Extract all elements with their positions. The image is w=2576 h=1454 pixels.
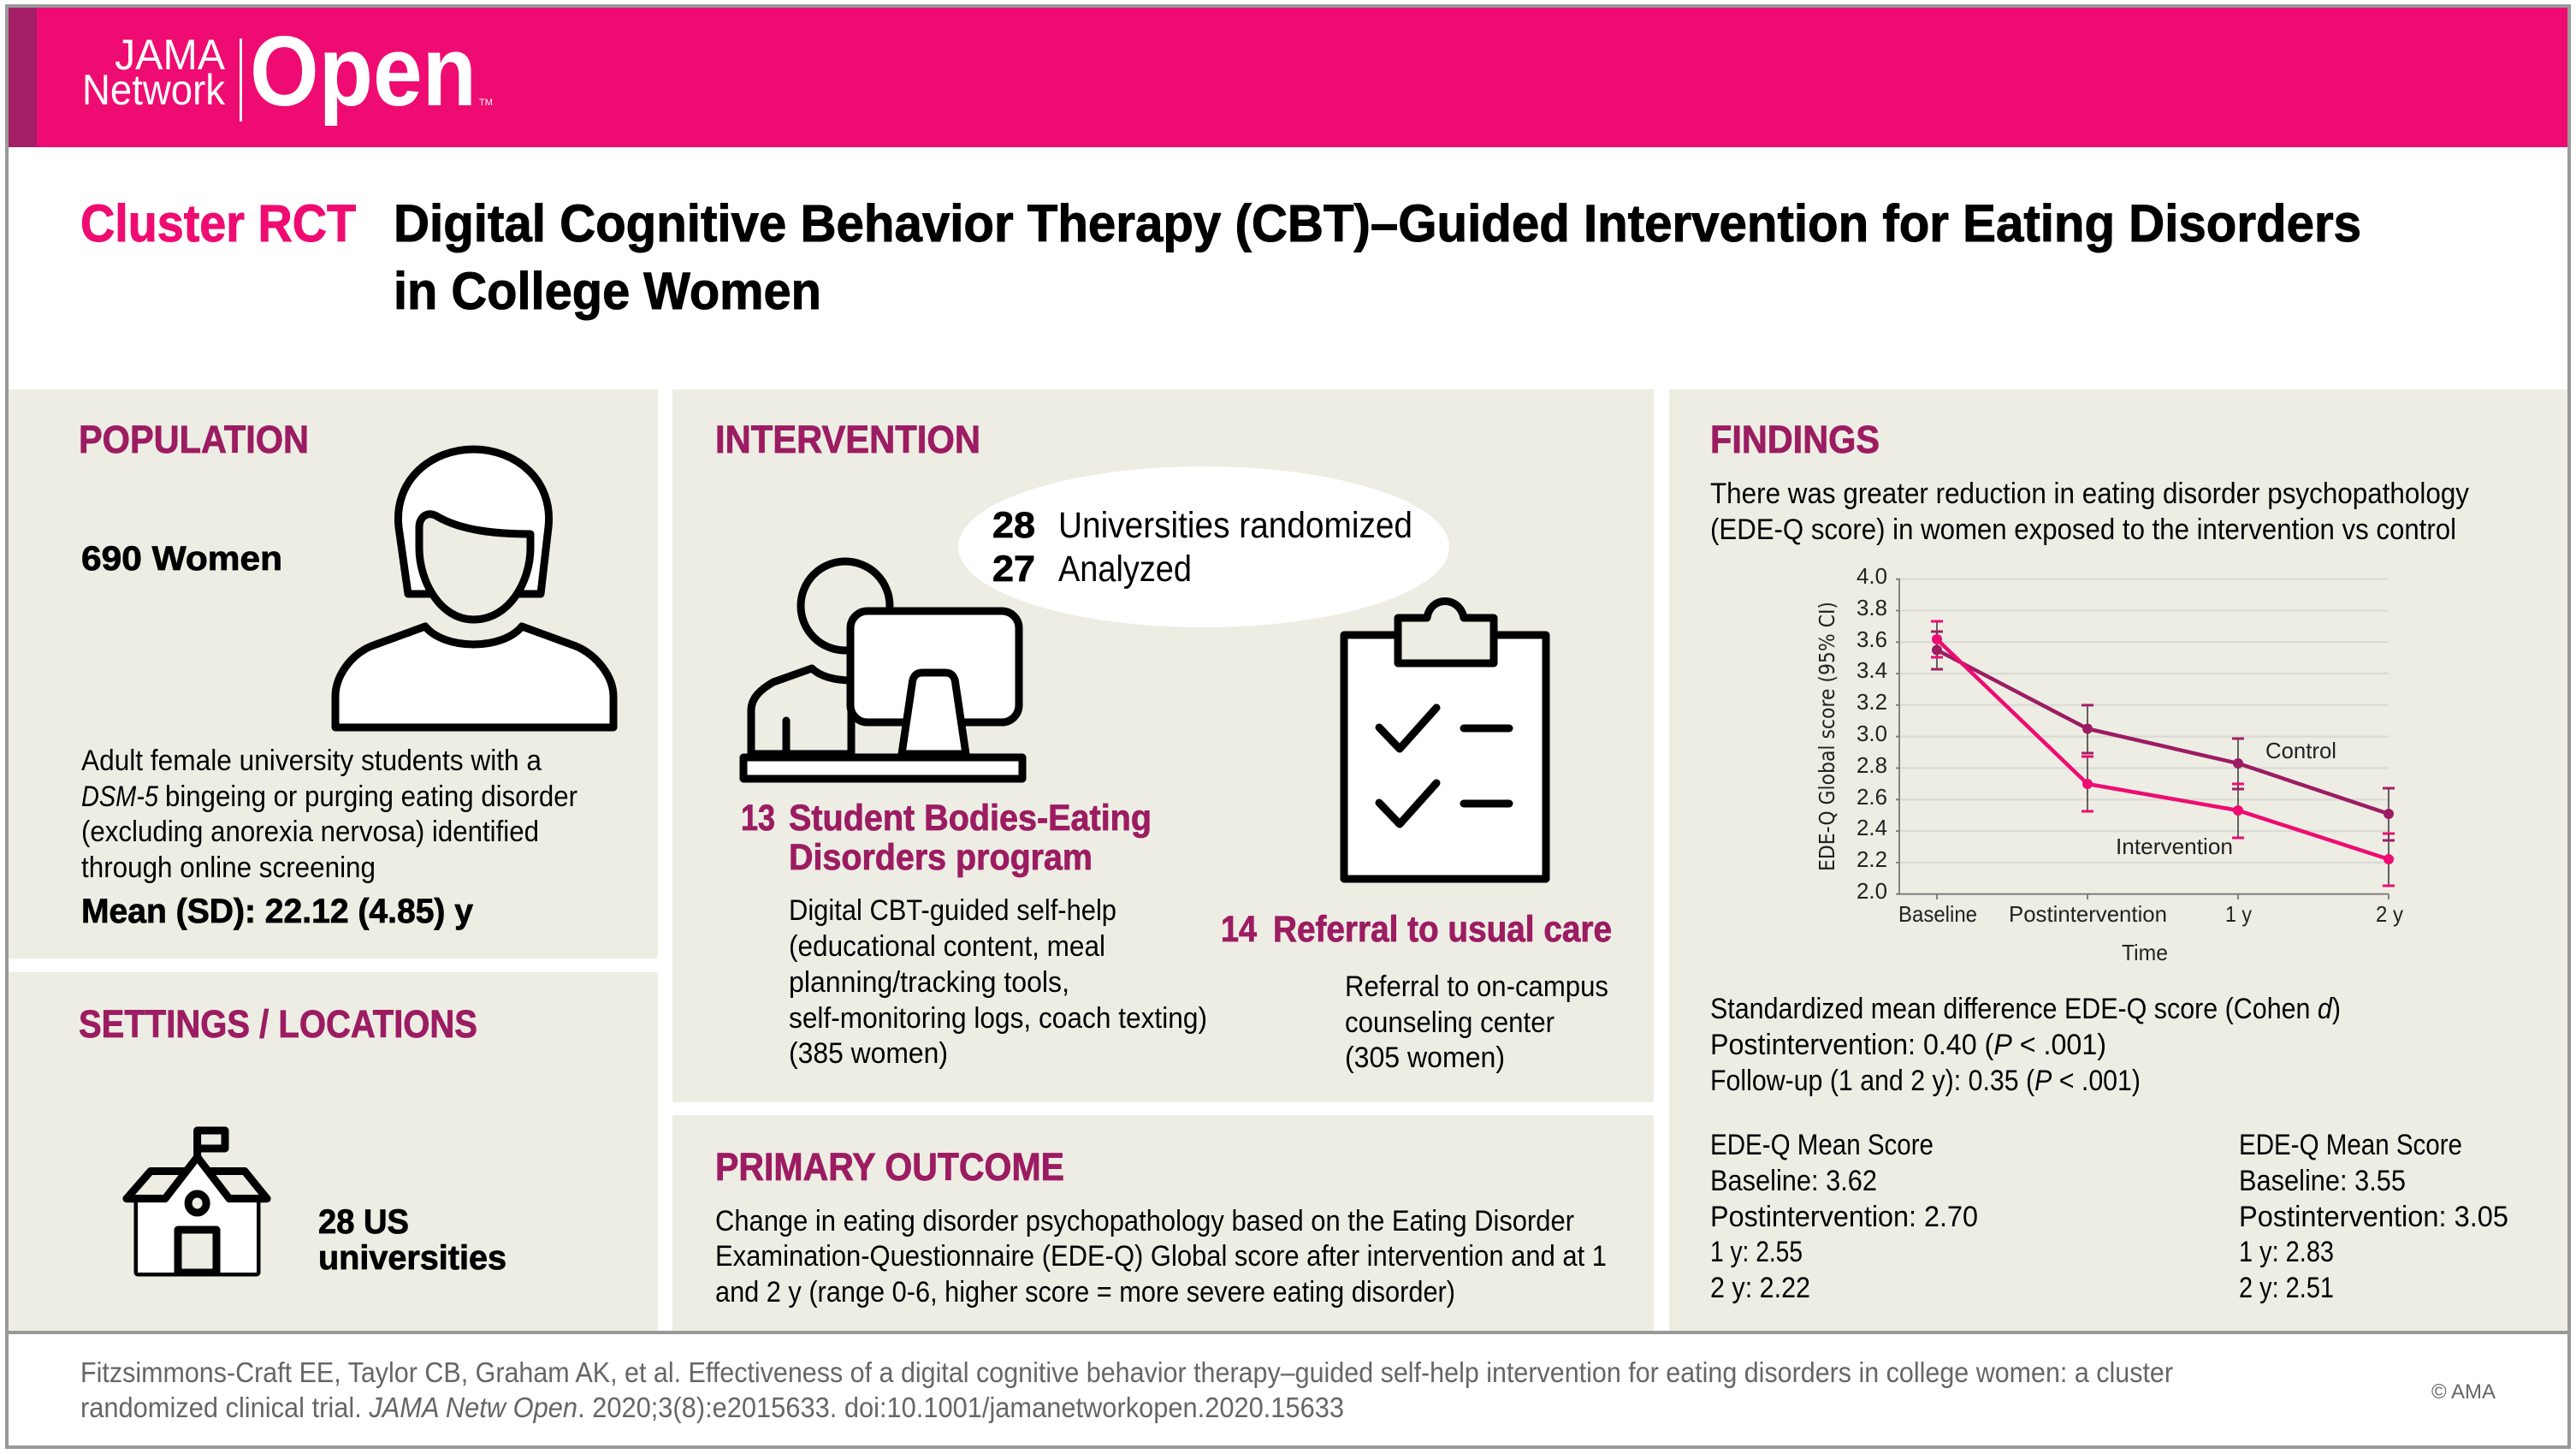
series label: control: Control [2265,738,2336,763]
footer citation: randomized clinical trial. JAMA Netw Open. 2020;3(8):e2015633. doi:10.1001/jamanetworkopen.2020.15633 [80,1392,1344,1423]
control mean scores: 2 y: 2.51 [2239,1272,2334,1304]
arm description: student bodies: planning/tracking tools, [789,966,1069,999]
arm description: usual care: Referral to on-campus [1345,970,1608,1003]
arm label: student bodies: Disorders program [789,837,1093,878]
logo: JAMA Network Open: JAMA [115,31,226,79]
y-axis tick labels: 4.0 [1856,563,1887,589]
y-axis tick labels: 3.0 [1856,721,1887,746]
arm description: student bodies: (educational content, meal [789,930,1105,963]
description: (excluding anorexia nervosa) identified [81,816,539,848]
callout: universities randomized [958,466,1449,627]
logo: JAMA Network Open: Network [82,66,226,114]
outcome description: Examination-Questionnaire (EDE-Q) Global score after intervention and at 1 [715,1240,1607,1273]
description [81,745,577,884]
intervention mean scores: 1 y: 2.55 [1710,1236,1803,1268]
icon: person at computer [743,561,1022,779]
count: 28 US universities [318,1203,506,1277]
arm label: usual care: Referral to usual care [1273,909,1612,950]
y-axis tick labels [1856,563,1887,904]
x-axis labels: Time [2122,940,2168,965]
description: bingeing or purging eating disorder [165,780,577,813]
count: 28 US universities: universities [318,1239,506,1277]
effect sizes: Standardized mean difference EDE-Q score (Cohen d) [1710,993,2341,1025]
effect sizes: Follow-up (1 and 2 y): 0.35 (P < .001) [1710,1065,2141,1097]
heading: findings: FINDINGS [1710,418,1880,461]
effect sizes: Postintervention: 0.40 (P < .001) [1710,1029,2106,1061]
header banner [7,7,2569,147]
title: Digital Cognitive Behavior Therapy (CBT)–Guided Intervention for Eating Disorders [394,194,2361,252]
series: intervention line [1932,634,2394,864]
findings summary: There was greater reduction in eating disorder psychopathology [1710,478,2469,510]
series: control line [1932,645,2394,819]
findings summary: (EDE-Q score) in women exposed to the intervention vs control [1710,513,2456,546]
outcome description: Change in eating disorder psychopathology based on the Eating Disorder [715,1205,1574,1237]
icon: woman [335,449,613,727]
y-axis tick labels: 2.2 [1856,846,1887,872]
x-axis labels [1898,901,2403,965]
y-axis tick labels: 2.6 [1856,784,1887,810]
panel: population [9,389,658,958]
arm description: student bodies [789,894,1207,1070]
arm description: usual care [1345,970,1608,1074]
control mean scores: 1 y: 2.83 [2239,1236,2334,1268]
control mean scores [2239,1129,2508,1304]
arm label: usual care: 14 [1221,909,1257,950]
outcome description: and 2 y (range 0-6, higher score = more severe eating disorder) [715,1276,1455,1309]
series: control error bars [1937,632,2389,840]
study type label: Cluster RCT [80,194,356,252]
callout: universities randomized: 27 [992,549,1035,590]
arm label: student bodies: 13 [741,798,775,839]
arm label: student bodies: Student Bodies-Eating [789,798,1152,839]
x-axis labels: Postintervention [2009,901,2167,927]
footer citation: Fitzsimmons-Craft EE, Taylor CB, Graham AK, et al. Effectiveness of a digital cognitive behavior therapy–guided self-help intervention for eating disorders in college women: a cluster [80,1356,2173,1388]
outcome description [715,1205,1607,1309]
heading: population: POPULATION [79,418,309,461]
intervention error caps [1931,621,2395,886]
panel: intervention [672,389,1654,1102]
count: 28 US universities: 28 US [318,1203,409,1241]
arm description: usual care: (305 women) [1345,1042,1505,1074]
logo: JAMA Network Open [82,15,493,127]
title: in College Women [394,262,821,320]
callout: universities randomized: Analyzed [1058,549,1192,590]
control mean scores: Baseline: 3.55 [2239,1165,2406,1197]
intervention mean scores [1710,1129,1978,1304]
y-axis tick labels: 3.2 [1856,689,1887,715]
panel: primary outcome [672,1115,1654,1331]
logo: JAMA Network Open: Open [250,15,477,127]
count: 690 women: 690 Women [81,540,282,578]
line chart: EDE-Q global score over time [1815,563,2403,965]
icon: school [127,1131,267,1273]
x-axis labels: 1 y [2225,901,2252,927]
control mean scores: EDE-Q Mean Score [2239,1129,2462,1161]
intervention mean scores: Postintervention: 2.70 [1710,1201,1978,1233]
arm description: student bodies: Digital CBT-guided self-help [789,894,1116,927]
panel: settings / locations [9,972,658,1331]
y-axis tick labels: 2.0 [1856,878,1887,904]
heading: settings: SETTINGS / LOCATIONS [79,1002,477,1046]
heading: primary outcome: PRIMARY OUTCOME [715,1145,1064,1189]
arm label: student bodies [741,798,1152,878]
intervention mean scores: 2 y: 2.22 [1710,1272,1810,1304]
heading: intervention: INTERVENTION [715,418,980,461]
x-axis labels: Baseline [1898,901,1977,927]
y-axis tick labels: 3.8 [1856,595,1887,620]
series label: intervention: Intervention [2116,834,2233,859]
intervention mean scores: EDE-Q Mean Score [1710,1129,1933,1161]
effect sizes [1710,993,2341,1097]
description: through online screening [81,852,376,884]
mean age: Mean (SD): 22.12 (4.85) y [81,893,474,930]
description: Adult female university students with a [81,745,542,777]
panel: findings [1669,389,2567,1331]
y-axis tick labels: 2.4 [1856,815,1887,840]
x-axis labels: 2 y [2376,901,2403,927]
y-axis tick labels: 3.6 [1856,626,1887,652]
y-axis tick labels: 2.8 [1856,752,1887,778]
intervention mean scores: Baseline: 3.62 [1710,1165,1877,1197]
control mean scores: Postintervention: 3.05 [2239,1201,2508,1233]
callout: universities randomized: Universities randomized [1058,505,1412,546]
description: DSM-5 [81,780,158,813]
copyright: © AMA [2431,1380,2496,1404]
callout: universities randomized: 28 [992,505,1035,546]
arm description: student bodies: self-monitoring logs, coach texting) [789,1002,1207,1035]
arm description: usual care: counseling center [1345,1006,1554,1039]
y-axis tick labels: 3.4 [1856,657,1887,683]
arm description: student bodies: (385 women) [789,1037,948,1070]
footer citation [80,1356,2173,1423]
icon: clipboard with checks [1344,601,1546,879]
findings summary [1710,478,2469,546]
title [394,194,2361,320]
series: intervention error bars [1937,621,2389,886]
y-axis title: EDE-Q Global score (95% CI) [1815,602,1839,871]
logo: JAMA Network Open: TM [479,98,493,108]
control error caps [1931,632,2395,840]
